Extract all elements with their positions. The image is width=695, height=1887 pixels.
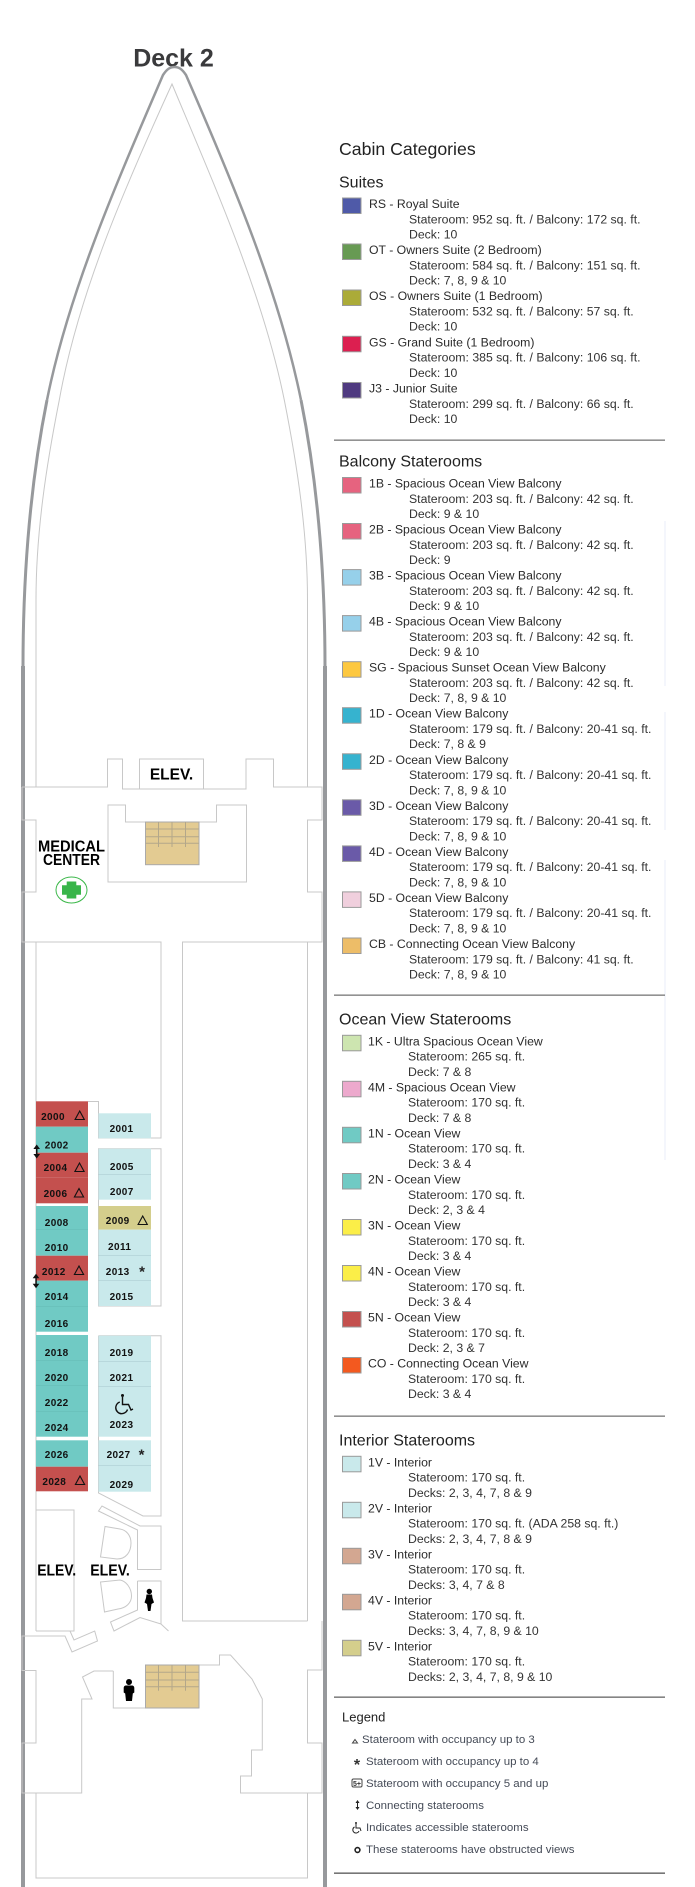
cabin 2024: 2024: [45, 1423, 69, 1434]
4B item: Deck: 9 & 10: [409, 645, 479, 659]
4M item: [342, 1080, 525, 1125]
cabin 2029: 2029: [110, 1480, 133, 1491]
2N item: [342, 1172, 525, 1217]
OS item: Deck: 10: [409, 320, 458, 334]
1K item: Deck: 7 & 8: [408, 1065, 472, 1079]
cabin 2015: [98, 1281, 151, 1306]
4B item: 4B - Spacious Ocean View Balcony: [369, 615, 562, 629]
CO item: Deck: 3 & 4: [408, 1387, 472, 1401]
OS item: Stateroom: 532 sq. ft. / Balcony: 57 sq. ft.: [409, 304, 634, 318]
cabin 2023 with accessible icon: 2023: [110, 1420, 133, 1431]
1B item: Deck: 9 & 10: [409, 507, 479, 521]
cabin 2013: 2013: [106, 1267, 130, 1278]
icon: women's restroom: [144, 1589, 154, 1611]
5V item: Decks: 2, 3, 4, 7, 8, 9 & 10: [408, 1670, 553, 1684]
legend: accessible staterooms: Indicates accessible staterooms: [366, 1822, 529, 1834]
cabin 2008: 2008: [45, 1218, 69, 1229]
divider: ocean view: [334, 1416, 665, 1417]
cabin 2010: [36, 1229, 88, 1256]
1B item: 1B - Spacious Ocean View Balcony: [369, 476, 562, 490]
2B item: Stateroom: 203 sq. ft. / Balcony: 42 sq. ft.: [409, 538, 634, 552]
4V item: 4V - Interior: [368, 1593, 432, 1607]
cabin 2000: [36, 1101, 88, 1127]
label: upper elevator: [140, 759, 204, 789]
1K item: Stateroom: 265 sq. ft.: [408, 1050, 525, 1064]
RS item: RS - Royal Suite: [369, 197, 460, 211]
panel heading: Cabin Categories: Cabin Categories: [339, 139, 476, 159]
legend: obstructed views: These staterooms have obstructed views: [366, 1844, 575, 1856]
cabin 2020: [36, 1361, 88, 1386]
1V item: [342, 1455, 532, 1500]
cabin 2004: [36, 1153, 88, 1178]
label: medical center: CENTER: [43, 852, 100, 869]
4M item: 4M - Spacious Ocean View: [368, 1080, 516, 1094]
cabin 2021: 2021: [110, 1373, 133, 1384]
3N item: Deck: 3 & 4: [408, 1249, 472, 1263]
section heading: Suites: Suites: [339, 174, 383, 192]
title: Deck 2: Deck 2: [133, 44, 214, 72]
SG item: Deck: 7, 8, 9 & 10: [409, 691, 507, 705]
divider: legend: [334, 1872, 665, 1874]
OT item: [342, 243, 641, 288]
2V item: [342, 1501, 618, 1546]
3V item: Stateroom: 170 sq. ft.: [408, 1563, 525, 1577]
4N item: Deck: 3 & 4: [408, 1295, 472, 1309]
4B item: Stateroom: 203 sq. ft. / Balcony: 42 sq. ft.: [409, 630, 634, 644]
5V item: Stateroom: 170 sq. ft.: [408, 1655, 525, 1669]
OS item: [342, 289, 634, 334]
cabin 2027: *: [139, 1446, 145, 1464]
J3 item: Deck: 10: [409, 412, 458, 426]
SG item: SG - Spacious Sunset Ocean View Balcony: [369, 661, 607, 675]
cabin 2008: [36, 1206, 88, 1229]
1B item: [342, 476, 634, 521]
4M item: Deck: 7 & 8: [408, 1111, 472, 1125]
3D item: Stateroom: 179 sq. ft. / Balcony: 20-41 sq. ft.: [409, 814, 651, 828]
1D item: Deck: 7, 8 & 9: [409, 737, 486, 751]
cabin 2015: 2015: [110, 1292, 133, 1303]
2B item: 2B - Spacious Ocean View Balcony: [369, 522, 562, 536]
label: aft elevator right: ELEV.: [90, 1562, 130, 1580]
cabin 2000: 2000: [41, 1112, 65, 1123]
cabin 2009: 2009: [106, 1216, 130, 1227]
legend: occupancy 5 and up: Stateroom with occupancy 5 and up: [366, 1778, 548, 1790]
label: upper elevator: ELEV.: [150, 766, 193, 784]
4D item: Deck: 7, 8, 9 & 10: [409, 875, 507, 889]
legend: connecting staterooms: Connecting staterooms: [366, 1800, 484, 1812]
cabin 2026: [36, 1440, 88, 1467]
OT item: Deck: 7, 8, 9 & 10: [409, 274, 507, 288]
1B item: Stateroom: 203 sq. ft. / Balcony: 42 sq. ft.: [409, 492, 634, 506]
cabin 2016: [36, 1307, 88, 1332]
cabin 2001: [98, 1113, 151, 1138]
3V item: Decks: 3, 4, 7 & 8: [408, 1578, 505, 1592]
cabin 2009: [98, 1206, 151, 1230]
2B item: [342, 522, 634, 567]
label: medical center: MEDICAL: [38, 838, 105, 856]
4N item: 4N - Ocean View: [368, 1264, 461, 1278]
4N item: [342, 1264, 525, 1309]
3N item: [342, 1218, 525, 1263]
cabin 2005: [98, 1149, 151, 1174]
cabin 2026: 2026: [45, 1450, 69, 1461]
legend: occupancy up to 4: Stateroom with occupancy up to 4: [366, 1756, 539, 1768]
cabin 2006: 2006: [44, 1189, 67, 1200]
5N item: Stateroom: 170 sq. ft.: [408, 1326, 525, 1340]
1D item: [342, 707, 651, 751]
cabin 2019: 2019: [110, 1348, 133, 1359]
1K item: 1K - Ultra Spacious Ocean View: [368, 1034, 543, 1048]
1N item: [342, 1126, 525, 1171]
legend: occupancy 5 and up: 5+: [353, 1781, 361, 1788]
stairs: forward: [146, 822, 199, 865]
cabin 2018: 2018: [45, 1348, 69, 1359]
cabin 2022: 2022: [45, 1398, 69, 1409]
4D item: 4D - Ocean View Balcony: [369, 845, 509, 859]
2D item: [342, 753, 651, 797]
J3 item: J3 - Junior Suite: [369, 382, 458, 396]
3D item: Deck: 7, 8, 9 & 10: [409, 829, 507, 843]
3B item: 3B - Spacious Ocean View Balcony: [369, 569, 562, 583]
cabin 2022: [36, 1386, 88, 1412]
2D item: Deck: 7, 8, 9 & 10: [409, 783, 507, 797]
cell dividers: [36, 1174, 151, 1466]
cabin 2012: [36, 1256, 88, 1281]
cabin 2002: 2002: [45, 1140, 69, 1152]
3D item: [342, 799, 651, 843]
3D item: 3D - Ocean View Balcony: [369, 799, 509, 813]
3N item: Stateroom: 170 sq. ft.: [408, 1234, 525, 1248]
CO item: [342, 1356, 529, 1401]
cabin 2024: [36, 1412, 88, 1437]
stairs: aft: [146, 1665, 199, 1708]
cabin 2016: 2016: [45, 1319, 69, 1330]
cabin 2007: 2007: [110, 1187, 134, 1198]
2D item: 2D - Ocean View Balcony: [369, 753, 509, 767]
RS item: Stateroom: 952 sq. ft. / Balcony: 172 sq. ft.: [409, 212, 641, 226]
2N item: Stateroom: 170 sq. ft.: [408, 1188, 525, 1202]
1N item: 1N - Ocean View: [368, 1126, 461, 1140]
ship hull outline: [23, 67, 325, 1887]
cabin 2014: 2014: [45, 1292, 69, 1303]
cabin 2001: 2001: [110, 1124, 133, 1135]
cabin 2023 with accessible icon: [98, 1386, 151, 1437]
cabin 2011: 2011: [108, 1242, 131, 1253]
RS item: Deck: 10: [409, 228, 458, 242]
cabin 2006: [36, 1178, 88, 1203]
GS item: Deck: 10: [409, 366, 458, 380]
3V item: 3V - Interior: [368, 1547, 432, 1561]
cabin 2011: [98, 1230, 151, 1256]
1V item: 1V - Interior: [368, 1455, 432, 1469]
2V item: Decks: 2, 3, 4, 7, 8 & 9: [408, 1532, 532, 1546]
2N item: 2N - Ocean View: [368, 1172, 461, 1186]
CO item: Stateroom: 170 sq. ft.: [408, 1372, 525, 1386]
cabin 2020: 2020: [45, 1373, 69, 1384]
OT item: OT - Owners Suite (2 Bedroom): [369, 243, 542, 257]
CB item: CB - Connecting Ocean View Balcony: [369, 937, 576, 951]
deck plan walls: [22, 759, 322, 1878]
cabin 2027: [98, 1440, 151, 1466]
legend: occupancy up to 3: Stateroom with occupancy up to 3: [362, 1734, 535, 1746]
cabin 2007: [98, 1174, 151, 1200]
cabin 2014: [36, 1281, 88, 1307]
section heading: Interior Staterooms: Interior Staterooms: [339, 1432, 475, 1450]
cabin 2021: [98, 1361, 151, 1386]
4D item: Stateroom: 179 sq. ft. / Balcony: 20-41 sq. ft.: [409, 860, 651, 874]
CB item: Stateroom: 179 sq. ft. / Balcony: 41 sq. ft.: [409, 952, 634, 966]
2D item: Stateroom: 179 sq. ft. / Balcony: 20-41 sq. ft.: [409, 768, 651, 782]
4D item: [342, 845, 651, 889]
legend: occupancy up to 4: [354, 1756, 539, 1774]
3V item: [342, 1547, 525, 1592]
1N item: Stateroom: 170 sq. ft.: [408, 1142, 525, 1156]
4M item: Stateroom: 170 sq. ft.: [408, 1096, 525, 1110]
5N item: [342, 1310, 525, 1355]
legend heading: Legend: [342, 1710, 385, 1724]
5N item: 5N - Ocean View: [368, 1310, 461, 1324]
icon: medical cross: [56, 877, 87, 903]
cabin 2019: [98, 1336, 151, 1361]
cabin 2018: [36, 1335, 88, 1361]
faint right-margin traces: [664, 521, 666, 1160]
cabin 2005: 2005: [110, 1162, 134, 1173]
4V item: Stateroom: 170 sq. ft.: [408, 1609, 525, 1623]
4N item: Stateroom: 170 sq. ft.: [408, 1280, 525, 1294]
label: aft elevator left: ELEV.: [37, 1562, 76, 1580]
CB item: [342, 937, 634, 982]
3B item: Deck: 9 & 10: [409, 599, 479, 613]
GS item: [342, 335, 641, 380]
5D item: 5D - Ocean View Balcony: [369, 891, 509, 905]
1V item: Decks: 2, 3, 4, 7, 8 & 9: [408, 1486, 532, 1500]
1D item: Stateroom: 179 sq. ft. / Balcony: 20-41 sq. ft.: [409, 722, 651, 736]
J3 item: Stateroom: 299 sq. ft. / Balcony: 66 sq. ft.: [409, 397, 634, 411]
3B item: Stateroom: 203 sq. ft. / Balcony: 42 sq. ft.: [409, 584, 634, 598]
1K item: [342, 1034, 543, 1079]
5N item: Deck: 2, 3 & 7: [408, 1341, 485, 1355]
5D item: Stateroom: 179 sq. ft. / Balcony: 20-41 sq. ft.: [409, 906, 651, 920]
SG item: Stateroom: 203 sq. ft. / Balcony: 42 sq. ft.: [409, 676, 634, 690]
icon: connecting arrow lower: [33, 1274, 39, 1288]
2B item: Deck: 9: [409, 553, 451, 567]
cabin 2028: [36, 1467, 88, 1491]
divider: suites: [334, 440, 665, 441]
CO item: CO - Connecting Ocean View: [368, 1356, 529, 1370]
inner hull wall: [36, 84, 308, 787]
cabin 2029: [98, 1466, 151, 1492]
cabin 2012: 2012: [42, 1267, 66, 1278]
section heading: Balcony Staterooms: Balcony Staterooms: [339, 454, 482, 470]
GS item: GS - Grand Suite (1 Bedroom): [369, 335, 534, 349]
GS item: Stateroom: 385 sq. ft. / Balcony: 106 sq. ft.: [409, 351, 641, 365]
2V item: Stateroom: 170 sq. ft. (ADA 258 sq. ft.): [408, 1517, 618, 1531]
divider: balcony: [334, 994, 665, 996]
divider: interior: [334, 1696, 665, 1698]
3B item: [342, 569, 634, 613]
legend: occupancy up to 4: *: [354, 1757, 361, 1774]
5V item: [342, 1639, 553, 1684]
cabin 2027: 2027: [107, 1450, 130, 1461]
cabin 2028: 2028: [42, 1477, 66, 1488]
1D item: 1D - Ocean View Balcony: [369, 707, 509, 721]
5D item: [342, 891, 651, 935]
OS item: OS - Owners Suite (1 Bedroom): [369, 289, 543, 303]
4B item: [342, 615, 634, 659]
1N item: Deck: 3 & 4: [408, 1157, 472, 1171]
cabin 2013: [98, 1256, 151, 1281]
J3 item: [342, 382, 634, 426]
2V item: 2V - Interior: [368, 1501, 432, 1515]
icon: connecting arrow upper: [33, 1144, 40, 1158]
label: medical center: [38, 838, 105, 869]
5V item: 5V - Interior: [368, 1639, 432, 1653]
CB item: Deck: 7, 8, 9 & 10: [409, 968, 507, 982]
4V item: Decks: 3, 4, 7, 8, 9 & 10: [408, 1624, 539, 1638]
icon: men's restroom: [124, 1679, 134, 1701]
section heading: Ocean View Staterooms: Ocean View Staterooms: [339, 1012, 511, 1028]
cabin 2002: [36, 1127, 88, 1153]
SG item: [342, 661, 634, 705]
OT item: Stateroom: 584 sq. ft. / Balcony: 151 sq. ft.: [409, 258, 641, 272]
cabin 2013: *: [139, 1264, 145, 1280]
3N item: 3N - Ocean View: [368, 1218, 461, 1232]
cabin 2010: 2010: [45, 1243, 69, 1254]
2N item: Deck: 2, 3 & 4: [408, 1203, 485, 1217]
1V item: Stateroom: 170 sq. ft.: [408, 1471, 525, 1485]
RS item: [342, 197, 641, 242]
4V item: [342, 1593, 539, 1638]
5D item: Deck: 7, 8, 9 & 10: [409, 921, 507, 935]
cabin 2004: 2004: [44, 1163, 67, 1174]
